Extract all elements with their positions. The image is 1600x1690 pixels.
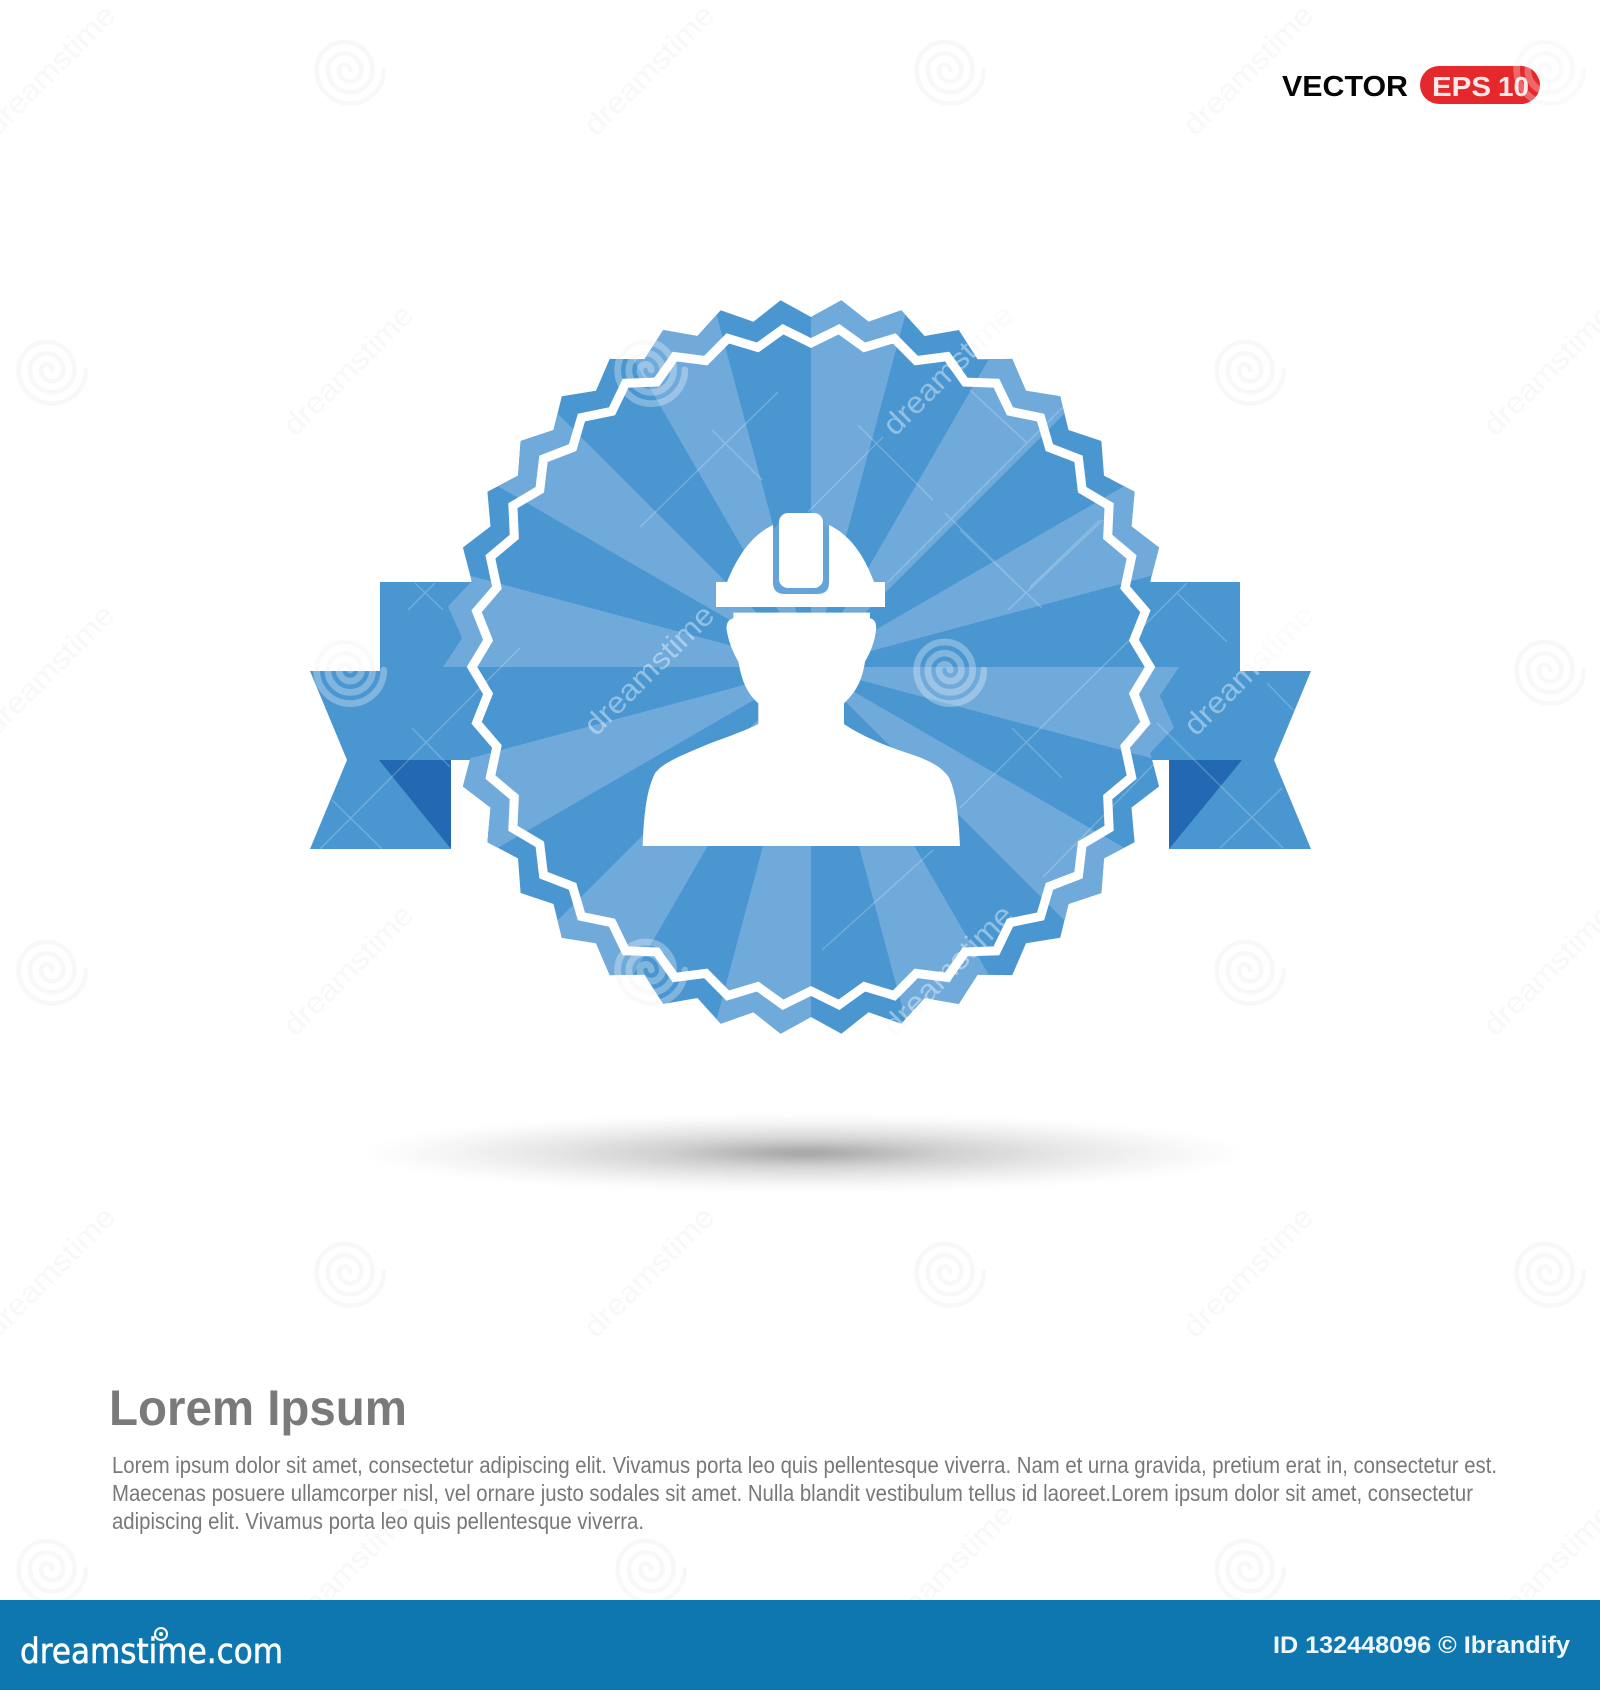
left ribbon (310, 582, 530, 849)
dreamstime logo: dreamstime.com (20, 1632, 283, 1672)
ground shadow (360, 1115, 1250, 1191)
heading: Lorem Ipsum (109, 1380, 407, 1436)
body text (112, 1452, 1497, 1534)
sunburst badge (443, 300, 1179, 1034)
watermark on white background: dreamstime (578, 1201, 721, 1344)
watermark on white background: dreamstime (1177, 1201, 1320, 1344)
watermark overlay on badge: dreamstime (877, 899, 1020, 1042)
watermark on white background: dreamstime (277, 899, 420, 1042)
vector label: VECTOR (1282, 71, 1408, 103)
watermark on white background: dreamstime (277, 299, 420, 442)
helmet strap frame (773, 522, 829, 594)
head and shoulders (643, 613, 960, 846)
watermark on white background: dreamstime (877, 899, 1020, 1042)
watermark on white background: dreamstime (578, 0, 721, 142)
watermark overlay on badge: dreamstime (578, 599, 721, 742)
body text: adipiscing elit. Vivamus porta leo quis pellentesque viverra. (112, 1508, 644, 1534)
footer bar (0, 1600, 1600, 1690)
watermark overlay on badge (317, 42, 1584, 1042)
watermark overlay on badge: dreamstime (877, 299, 1020, 442)
image id and credit: ID 132448096 © Ibrandify (1273, 1632, 1571, 1659)
right ribbon (1095, 582, 1311, 849)
helmet ridge (779, 513, 823, 588)
watermark overlay on badge: dreamstime (1178, 599, 1321, 742)
icon: worker with helmet (643, 513, 960, 846)
badge rays (443, 300, 1179, 1034)
helmet dome and brim (716, 525, 885, 607)
eps 10 red pill (1420, 66, 1540, 104)
white zigzag outline (472, 329, 1150, 1005)
watermark on white background: dreamstime (877, 1498, 1020, 1641)
watermark on white background: dreamstime (1177, 0, 1320, 142)
eps 10 red pill: 10 (1498, 71, 1529, 102)
vector eps 10 tag (1282, 66, 1540, 104)
watermark on white background: dreamstime (277, 1498, 420, 1641)
eps 10 red pill: EPS (1432, 71, 1491, 102)
watermark on white background: dreamstime (1178, 599, 1321, 742)
watermark on white background: dreamstime (877, 299, 1020, 442)
